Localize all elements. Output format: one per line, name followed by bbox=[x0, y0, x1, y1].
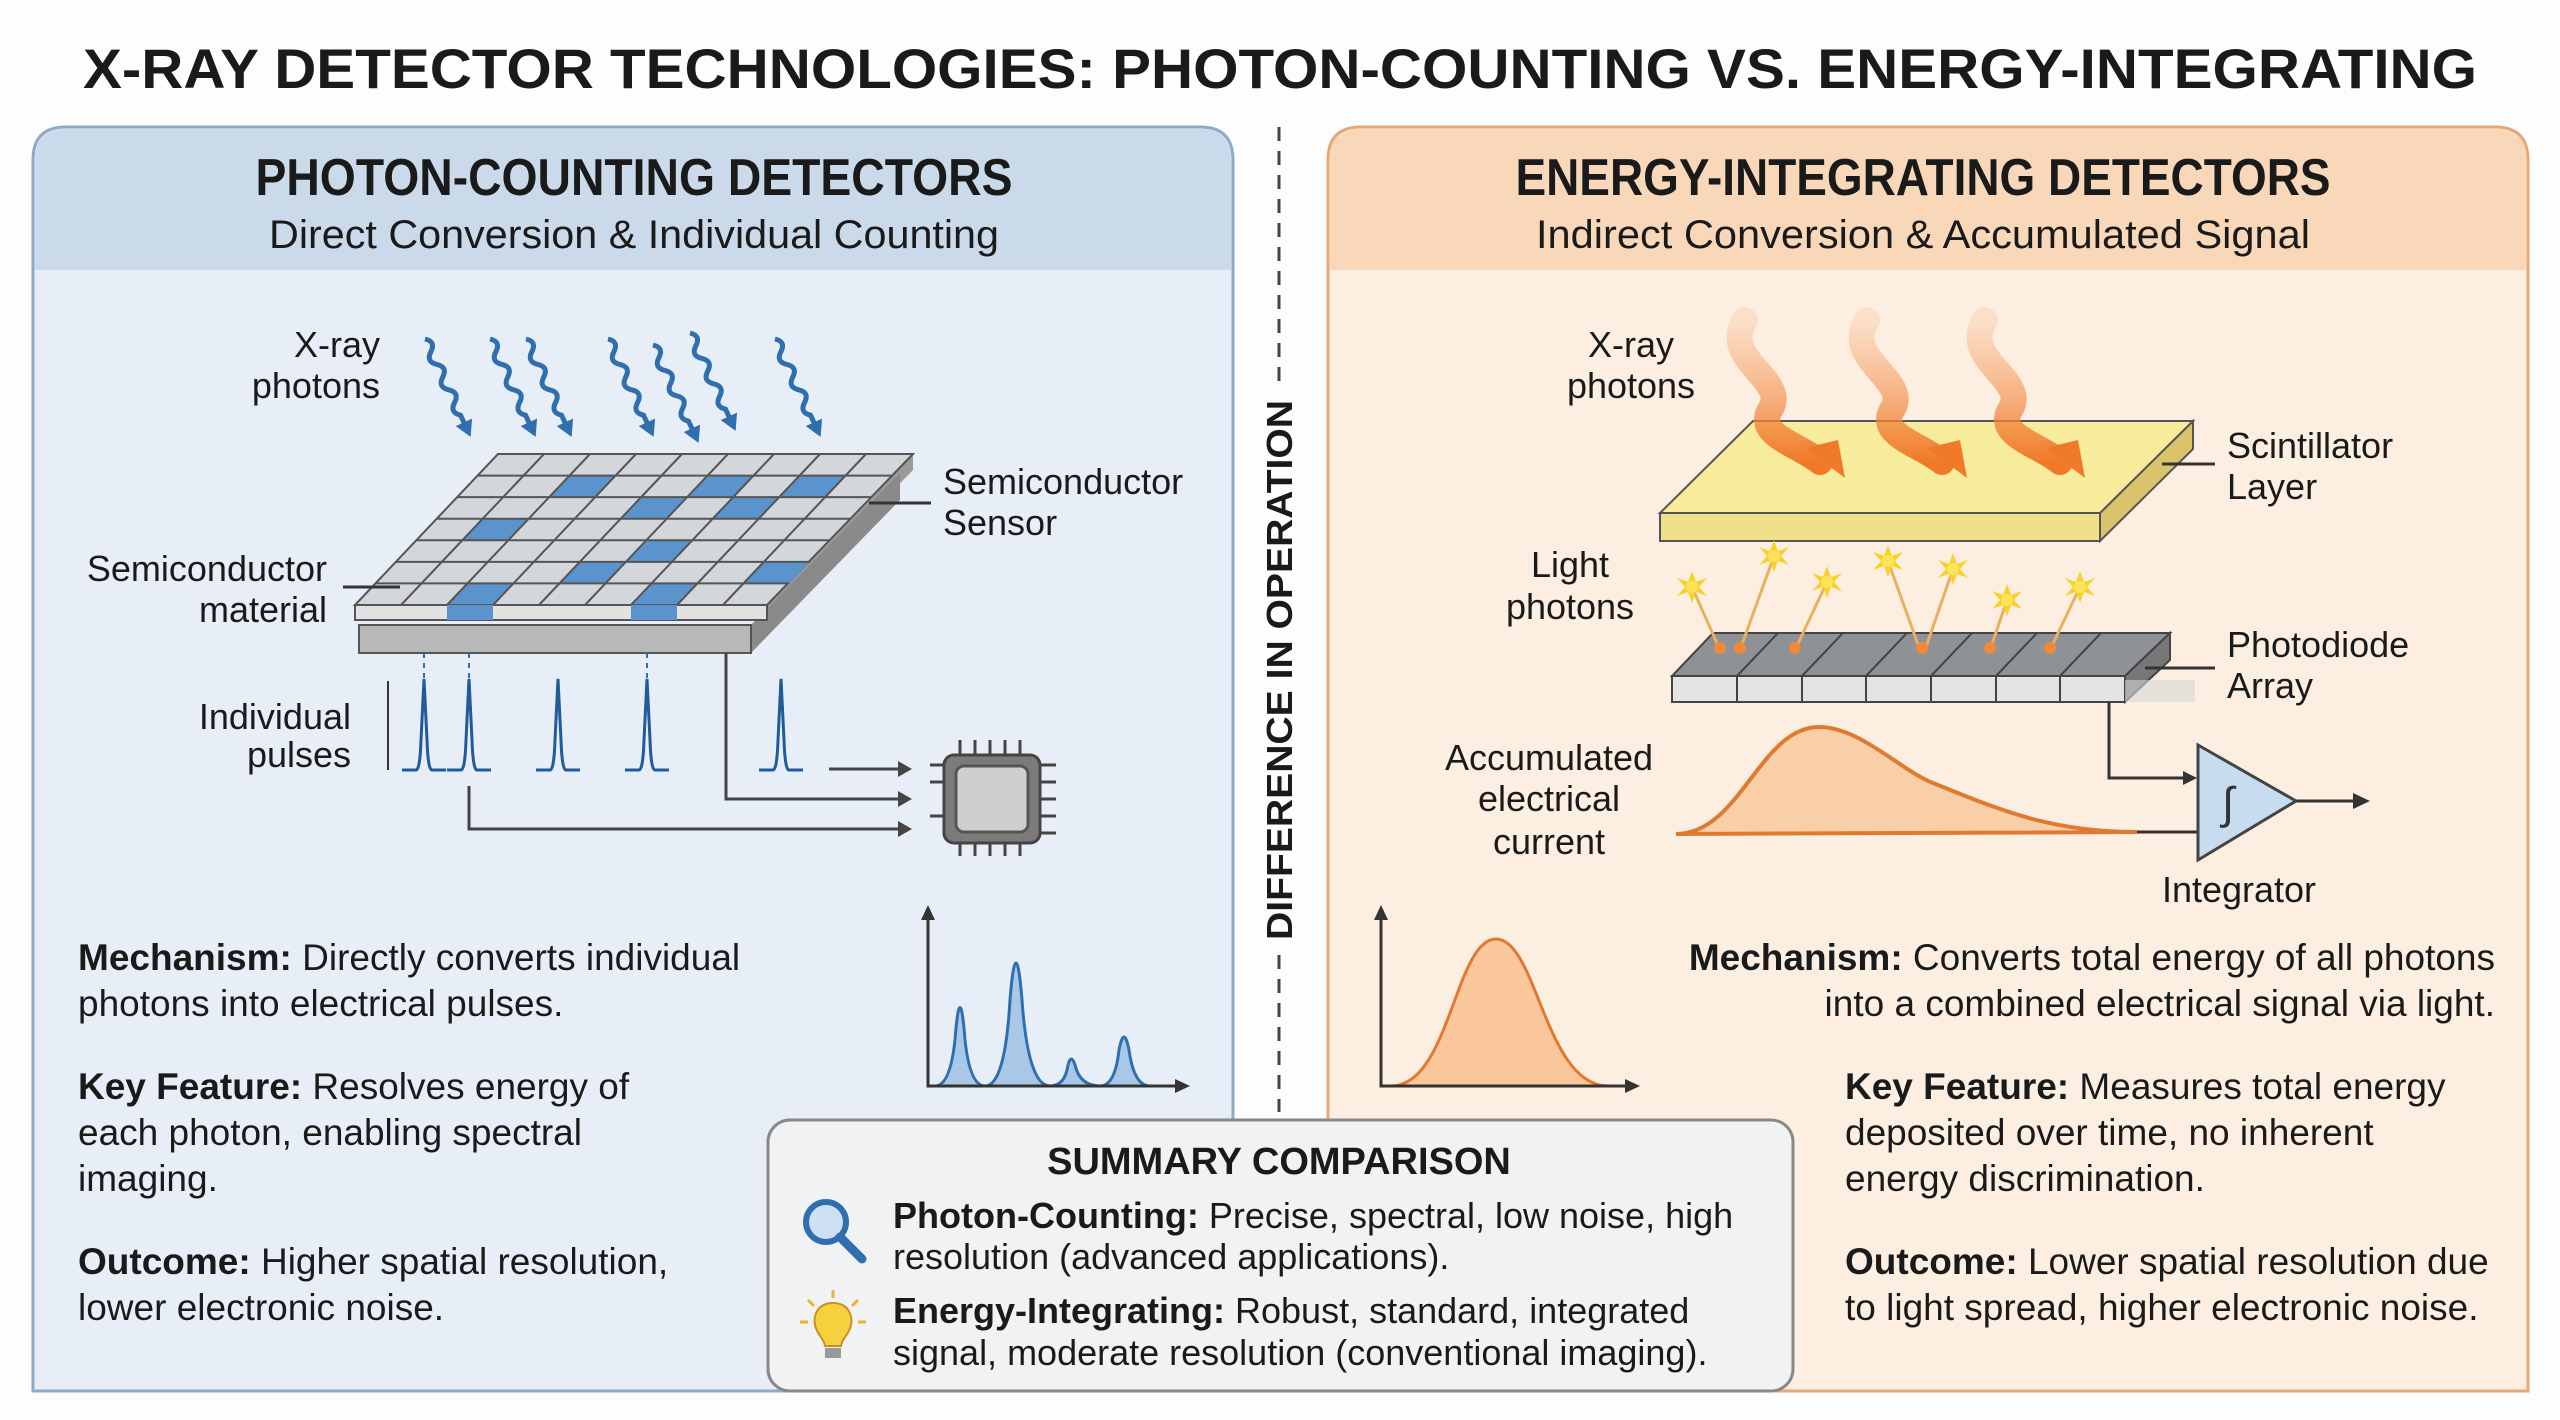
heading: photon-counting bbox=[256, 149, 1012, 257]
heading: summary: SUMMARY COMPARISON bbox=[1047, 1141, 1511, 1183]
label: individual pulses bbox=[199, 696, 351, 775]
label: x-ray photons: photons bbox=[1567, 365, 1695, 406]
text: energy-integrating outcome: to light spread, higher electronic noise. bbox=[1845, 1287, 2478, 1328]
label: accumulated current bbox=[1445, 737, 1653, 862]
text: photon-counting key feature: imaging. bbox=[78, 1158, 218, 1199]
label: accumulated current: electrical bbox=[1478, 778, 1620, 819]
text: photon-counting summary: resolution (advanced applications). bbox=[893, 1236, 1449, 1277]
text: photon-counting key feature: each photon, enabling spectral bbox=[78, 1112, 582, 1153]
heading: photon-counting: PHOTON-COUNTING DETECTORS bbox=[256, 149, 1012, 207]
label: light photons: photons bbox=[1506, 586, 1634, 627]
label: light photons: Light bbox=[1531, 544, 1609, 585]
panel: photon-counting bbox=[33, 127, 1233, 1391]
text: energy-integrating summary: Energy-Integrating: Robust, standard, integrated bbox=[893, 1290, 1689, 1331]
heading: energy-integrating bbox=[1516, 149, 2330, 257]
heading: photon-counting: Direct Conversion & Individual Counting bbox=[269, 213, 999, 257]
icon: x-ray photon arrows bbox=[417, 329, 829, 447]
text: energy-integrating summary bbox=[893, 1290, 1707, 1373]
label: accumulated current: Accumulated bbox=[1445, 737, 1653, 778]
text: energy-integrating key feature: deposited over time, no inherent bbox=[1845, 1112, 2374, 1153]
icon: integrator: ∫ bbox=[2219, 779, 2237, 828]
label: x-ray photons: photons bbox=[252, 365, 380, 406]
chart: individual pulses bbox=[388, 653, 803, 770]
text: energy-integrating outcome bbox=[1845, 1241, 2489, 1328]
arrows to processor bbox=[469, 653, 912, 837]
label: x-ray photons: X-ray bbox=[1588, 324, 1674, 365]
icon: integrator bbox=[2109, 702, 2370, 860]
icon: light photons bbox=[1677, 540, 2095, 654]
photodiode array bbox=[1672, 633, 2195, 702]
label: accumulated current: current bbox=[1493, 821, 1605, 862]
text: photon-counting mechanism bbox=[78, 937, 740, 1024]
text: photon-counting outcome: lower electronic noise. bbox=[78, 1287, 444, 1328]
label: semiconductor material: material bbox=[199, 589, 327, 630]
text: energy-integrating mechanism bbox=[1689, 937, 2495, 1024]
chart: accumulated current bbox=[1676, 727, 2137, 834]
sensor grid bbox=[355, 454, 913, 653]
label: semiconductor sensor: Semiconductor bbox=[943, 461, 1183, 502]
label: integrator: Integrator bbox=[2162, 869, 2316, 910]
heading: energy-integrating: ENERGY-INTEGRATING DETECTORS bbox=[1516, 149, 2330, 207]
label: individual pulses: Individual bbox=[199, 696, 351, 737]
icon: processor chip bbox=[930, 740, 1056, 856]
panel: energy-integrating bbox=[1328, 127, 2528, 1391]
label: scintillator layer: Scintillator bbox=[2227, 425, 2393, 466]
text: photon-counting key feature: Key Feature: Resolves energy of bbox=[78, 1066, 630, 1107]
label: individual pulses: pulses bbox=[247, 734, 351, 775]
text: energy-integrating outcome: Outcome: Lower spatial resolution due bbox=[1845, 1241, 2489, 1282]
label: scintillator layer bbox=[2162, 425, 2393, 507]
label: semiconductor sensor: Sensor bbox=[943, 502, 1057, 543]
text: energy-integrating key feature: Key Feature: Measures total energy bbox=[1845, 1066, 2446, 1107]
label: semiconductor material: Semiconductor bbox=[87, 548, 327, 589]
label: photodiode array bbox=[2145, 624, 2409, 706]
label: light photons bbox=[1506, 544, 1634, 627]
icon: magnifier bbox=[806, 1202, 862, 1259]
label: scintillator layer: Layer bbox=[2227, 466, 2317, 507]
text: photon-counting summary: Photon-Counting: Precise, spectral, low noise, high bbox=[893, 1195, 1733, 1236]
vertical label: difference in operation: DIFFERENCE IN OPERATION bbox=[1259, 400, 1300, 940]
text: energy-integrating key feature: energy discrimination. bbox=[1845, 1158, 2205, 1199]
label: x-ray photons bbox=[1567, 324, 1695, 406]
scintillator layer bbox=[1660, 421, 2193, 541]
divider: dashed line bbox=[1278, 127, 1280, 1112]
text: photon-counting key feature bbox=[78, 1066, 630, 1199]
title: X-RAY DETECTOR TECHNOLOGIES: PHOTON-COUNTING VS. ENERGY-INTEGRATING bbox=[83, 37, 2477, 100]
text: photon-counting outcome: Outcome: Higher spatial resolution, bbox=[78, 1241, 668, 1282]
heading: energy-integrating: Indirect Conversion & Accumulated Signal bbox=[1536, 213, 2310, 257]
icon: light bulb bbox=[800, 1290, 866, 1358]
label: photodiode array: Array bbox=[2227, 665, 2313, 706]
text: energy-integrating summary: signal, moderate resolution (conventional imaging). bbox=[893, 1332, 1707, 1373]
label: photodiode array: Photodiode bbox=[2227, 624, 2409, 665]
text: energy-integrating mechanism: into a combined electrical signal via light. bbox=[1825, 983, 2495, 1024]
text: photon-counting outcome bbox=[78, 1241, 668, 1328]
chart: energy spectrum peaks bbox=[921, 905, 1190, 1093]
text: photon-counting summary bbox=[893, 1195, 1733, 1277]
label: x-ray photons: X-ray bbox=[294, 324, 380, 365]
panel: summary comparison bbox=[768, 1120, 1793, 1391]
icon: x-ray flame arrows bbox=[1740, 320, 2085, 478]
chart: bell curve bbox=[1374, 905, 1640, 1093]
text: energy-integrating mechanism: Mechanism: Converts total energy of all photons bbox=[1689, 937, 2495, 978]
label: semiconductor sensor bbox=[869, 461, 1183, 543]
text: photon-counting mechanism: photons into electrical pulses. bbox=[78, 983, 563, 1024]
label: x-ray photons bbox=[252, 324, 380, 406]
text: photon-counting mechanism: Mechanism: Directly converts individual bbox=[78, 937, 740, 978]
label: semiconductor material bbox=[87, 548, 400, 630]
text: energy-integrating key feature bbox=[1845, 1066, 2446, 1199]
